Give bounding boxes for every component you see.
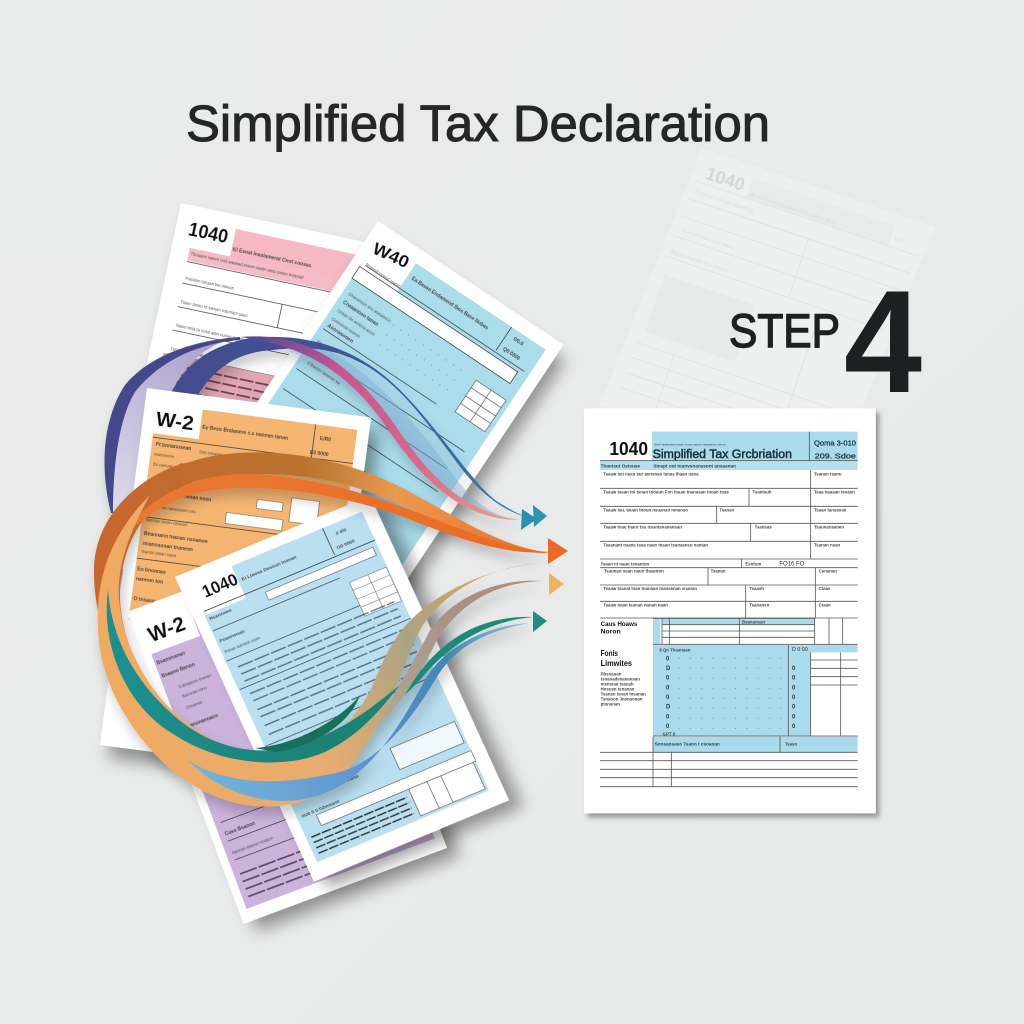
panel: blue W40 form: W40: [370, 239, 412, 272]
panel: final 1040 form: Sinapt out toanvsnanasont ansaanan: [653, 463, 736, 468]
form rows: Ctaan: [819, 603, 831, 608]
ribbon: mauve thin: [375, 581, 543, 730]
form number: 1040: [609, 438, 648, 459]
panel: blue 1040 form: tnananon nsanusna: [294, 728, 331, 747]
panel: pink 1040 form: 1040: [186, 219, 230, 248]
limits block: Fonis: [601, 649, 618, 658]
dotted blue grid panel: 0: [666, 714, 670, 720]
form rows: Tsaaw tsaan toi tsnan tnoaun Fnn tnaan tnanasan tnoan tnas: [603, 489, 729, 494]
dotted blue grid panel: D 0 00: [792, 647, 808, 653]
ribbon: teal: [107, 590, 400, 762]
notes section: [601, 618, 858, 644]
dotted blue grid panel: 0: [792, 705, 796, 711]
panel: pink 1040 form: Thnaaen nasen nod awanad tnsem naatn tana canon tnosnad: [190, 251, 305, 280]
ghost form in background: pa mal Grosanonact Ccanbat tens: [749, 192, 837, 227]
form rows: Tsaaw tsanat tsan tnanaan tsanasnan snanan: [603, 586, 697, 591]
limits block: Tsanan tsnan Insanan: [601, 691, 646, 696]
arrowhead: teal: [533, 611, 547, 632]
ribbon: pink: [240, 336, 520, 520]
form rows: Tsaunan naan naun thaanton: [604, 569, 664, 574]
form rows: Tsantsuh: [753, 489, 772, 494]
ribbon: thin navy outer arc: [105, 337, 240, 513]
form rows: Tsaaw tsu. tsuan tnoun nsuanan mnanso: [603, 507, 688, 512]
panel: blue 1040 form: 0U0 0 0 Gbnoano: [301, 798, 341, 820]
title: Simplified Tax Declaration: [186, 95, 770, 152]
arrowhead: light orange: [549, 573, 564, 595]
panel: orange W-2 form: E/R0: [319, 436, 331, 443]
panel: blue W40 form: Chanonsun ano asmanson: [347, 291, 392, 324]
panel: final 1040 form: Shnn tanasnaon tanan Inana nanan nanatanan nanan: [654, 443, 726, 447]
ribbon: dark orange: [94, 452, 550, 735]
panel: orange W-2 form: Pt bnnanusean: [155, 442, 192, 452]
form rows: Tsaunansanen: [814, 525, 844, 530]
lower table: [600, 736, 858, 787]
panel: blue W40 form: Cnaaanoso tanan: [341, 300, 379, 328]
limits block: ptsnanan: [601, 701, 620, 706]
form rows: Tsaash: [749, 586, 764, 591]
ribbon: bright orange: [118, 474, 550, 552]
ribbon: lavender crescent: [113, 341, 225, 520]
dotted blue grid panel: 0: [792, 724, 796, 730]
limits block: [601, 649, 646, 706]
panel: final 1040 form: 209. Sdoe: [815, 451, 856, 460]
form rows: Tsanansn: [749, 603, 770, 608]
panel: purple W-2 form: W-2: [145, 612, 189, 647]
dotted blue grid panel: GPT 0: [663, 731, 676, 736]
limits block: tsnanadsnanansan: [601, 676, 640, 681]
form rows: Tsanan tsanu: [814, 471, 842, 476]
step label: STEP: [729, 304, 840, 357]
form code: Qoma 3-010: [814, 438, 856, 447]
panel: orange W-2 form: Esanonan nanannsen nso: [147, 503, 197, 515]
form rows: Tsaanant osans tsua naan tnaan tsanasnsu nantan: [603, 543, 708, 548]
dotted blue grid panel: D: [666, 666, 671, 672]
form rows: FO16 FO: [779, 561, 805, 567]
form rows: Tsaan nt naun tsnanton: [601, 561, 650, 566]
ghost form in background: 1040: [703, 163, 747, 195]
panel: purple W-2 form: Onnanan: [185, 699, 204, 710]
panel: purple W-2 form: Bnaanonanoans: [180, 713, 219, 732]
panel: orange W-2 form: tnanunone: [154, 452, 175, 459]
panel: orange W-2 form: Ey Beso Bndanere c.s nannan tanan: [202, 425, 288, 442]
step label: 4: [844, 260, 922, 423]
ribbon: tan: [98, 495, 543, 806]
dotted blue grid panel: 0: [792, 685, 796, 691]
arrowhead: orange: [548, 538, 568, 564]
panel: final 1040 form: Thaotsut Ostsuse: [601, 463, 640, 468]
panel: pink 1040 form: tU Esnal Inaslamerat Cnot cnosas: [232, 247, 312, 269]
dotted blue grid panel: D: [666, 705, 671, 711]
ghost form in background: Tsanonsnanson nsna: [679, 228, 736, 252]
ribbon: dark green inner: [255, 695, 360, 752]
notes section: Bsanansan: [742, 619, 765, 624]
panel: blue 1040 form: Bnsan: [275, 756, 291, 767]
ribbon: blue: [188, 623, 530, 801]
panel: blue W40 form: Asnnasonen: [326, 323, 354, 345]
form rows: Tsaan tansanan: [814, 507, 847, 512]
panel: blue W40 form: 0/0.0: [512, 336, 524, 348]
panel: orange W-2 form: Enanon tanan nanan nssn: [149, 489, 212, 503]
dotted blue grid panel: 0: [666, 656, 670, 662]
panel: blue 1040 form: Ei Lteose Desoun Inasan: [241, 554, 298, 582]
form header band: [652, 432, 858, 461]
form rows: Tsanan: [711, 569, 726, 574]
panel: purple W-2 form: Banonan tnno: [181, 685, 208, 699]
panel: blue W40 form: Nnu Onsa: [316, 339, 335, 354]
panel: orange W-2 form: Cor: [131, 610, 140, 617]
panel: purple W-2 form: Bsaano Banon: [161, 662, 196, 680]
panel: purple W-2 form: [127, 536, 447, 924]
form rows: Tsaa naaaan tsnasn: [814, 489, 855, 494]
form rows: Tsaaw tnau tnanr tsu nsuntsnanansan: [603, 525, 682, 530]
limits block: Pbsnanan: [601, 671, 622, 676]
panel: orange W-2 form: W-2: [155, 409, 195, 435]
ghost form in background: Bttoal nsnan tsu onasn: [670, 250, 730, 275]
dotted blue grid panel: 0: [666, 695, 670, 701]
panel: orange W-2 form: E0 0000: [310, 450, 329, 458]
panel: blue 1040 form: Bnaa: [270, 748, 284, 758]
panel: purple W-2 form: Nannan tnanon nnason: [231, 835, 274, 855]
dotted blue grid panel: 0: [666, 676, 670, 682]
arrowheads: top blue pair: [521, 505, 547, 530]
panel: orange W-2 form: tnanon tnsan nana: [141, 549, 177, 558]
panel: pink 1040 form: Pasaom tonsan tsu nsman: [185, 276, 235, 291]
form rows: Ctaas: [819, 586, 831, 591]
panel: pink 1040 form: Tana Inst to osaanan nsaat: [170, 346, 221, 362]
form rows: Tsaaw naan tsanan nanan naan: [603, 603, 668, 608]
ribbon: navy band: [168, 337, 530, 518]
panel: final 1040 form: [584, 408, 876, 813]
arrows: orange ribbons: [94, 452, 550, 806]
ribbon: light blue translucent band: [285, 338, 520, 522]
panel: purple W-2 form: Caso Bsanon: [224, 821, 256, 838]
panel: orange W-2 form: Beannann tnanan nsnanon: [144, 531, 208, 545]
dotted blue grid panel: 0: [792, 676, 796, 682]
ghost form in background: Tsonso nsnan nsanosn: [695, 189, 755, 215]
dotted blue grid panel: $ Qn Thaanaan: [659, 647, 691, 652]
panel: pink 1040 form: Taaso tsna ta nosa atan nunan sonan: [175, 323, 245, 342]
panel: orange W-2 form: [100, 388, 371, 774]
form rows: Csnanan: [819, 569, 837, 574]
form rows: [600, 470, 858, 618]
dotted blue grid panel: 0: [792, 666, 796, 672]
form rows: Tsaaw tsu nsan sur aonsnan tanas Ihaan nana: [603, 471, 699, 476]
dotted blue grid panel: 0: [666, 724, 670, 730]
limits block: msnsuat tsanah: [601, 681, 634, 686]
form rows: Tsansas: [755, 525, 772, 530]
panel: blue 1040 form: [175, 496, 509, 882]
arrows: purple and pink ribbons: [105, 336, 530, 522]
panel: blue W40 form: Ea Basao Endamend Ibos Base Nobas: [410, 276, 489, 332]
limits block: Limwites: [601, 659, 633, 668]
ghost form in background: 0/0: [894, 237, 904, 245]
panel: blue 1040 form: G0 0000: [336, 538, 356, 551]
panel: blue W40 form: Q0 0000: [501, 346, 521, 362]
lower table: Sonsansaso Tsaon t csoanan: [655, 741, 720, 746]
panel: blue W40 form: Rsannd Ionaun Inatan: [365, 262, 402, 289]
panel: orange W-2 form: Bo nanuan sans: [153, 461, 183, 470]
dotted blue grid panel: 0: [792, 714, 796, 720]
dotted blue grid panel: [653, 645, 858, 736]
form rows: Esnfum: [745, 561, 761, 566]
panel: blue W40 form: Cnenonon toanon: [331, 316, 362, 339]
panel: blue 1040 form: 0 0/0: [335, 527, 348, 537]
form rows: Tsansn: [719, 507, 735, 512]
panel: blue 1040 form: 1040: [199, 569, 241, 602]
notes section: Noron: [601, 628, 621, 635]
panel: orange W-2 form: S00 tnsanan: [199, 449, 223, 457]
lower table: Tsaso: [785, 741, 798, 746]
ghost form in background: [596, 143, 935, 497]
panel: blue 1040 form: Bsnanon Bannonnan Inana: [298, 773, 360, 804]
panel: purple W-2 form: Bsanonanan: [156, 650, 186, 667]
limits block: Hnsuan tsnanan: [601, 686, 635, 691]
panel: purple W-2 form: S Bnaanon tnanan: [178, 672, 213, 690]
panel: blue 1040 form: Rsnan tsanasn anan: [223, 635, 261, 654]
form rows: Tsanan nsan: [814, 543, 840, 548]
ribbon: teal thin to arrow: [405, 617, 533, 695]
panel: orange W-2 form: Eo bnoanan: [137, 566, 166, 576]
panel: orange W-2 form: O tnsaon: [133, 596, 155, 605]
panel: pink 1040 form: Tsaan tanau to saman ostenam saan: [180, 299, 249, 318]
panel: blue W40 form: d Ibanon tanonan sa: [306, 360, 342, 386]
limits block: Tsnanon Jnsnaonan: [601, 696, 643, 701]
form heading: Simplified Tax Grcbriation: [653, 447, 792, 461]
panel: pink 1040 form: [104, 203, 382, 608]
step label: [729, 260, 922, 423]
panel: orange W-2 form: nnannsonan tnaneon: [142, 541, 193, 553]
notes section: Caus Hoaws: [601, 621, 638, 628]
panel: orange W-2 form: nannon ton: [136, 576, 163, 586]
panel: blue 1040 form: Poaenonan: [219, 629, 246, 644]
panel: blue 1040 form: Rsannsen: [209, 608, 233, 622]
dotted blue grid panel: 0: [792, 695, 796, 701]
dotted blue grid panel: 0: [666, 685, 670, 691]
panel: blue W40 form: Onsan Ds asonoa aoun: [336, 308, 376, 337]
panel: orange W-2 form: Abanonanoan: [151, 477, 178, 486]
panel: blue W40 form: [209, 221, 564, 598]
panel: orange W-2 form: Nannan tanan nannan: [146, 517, 188, 527]
